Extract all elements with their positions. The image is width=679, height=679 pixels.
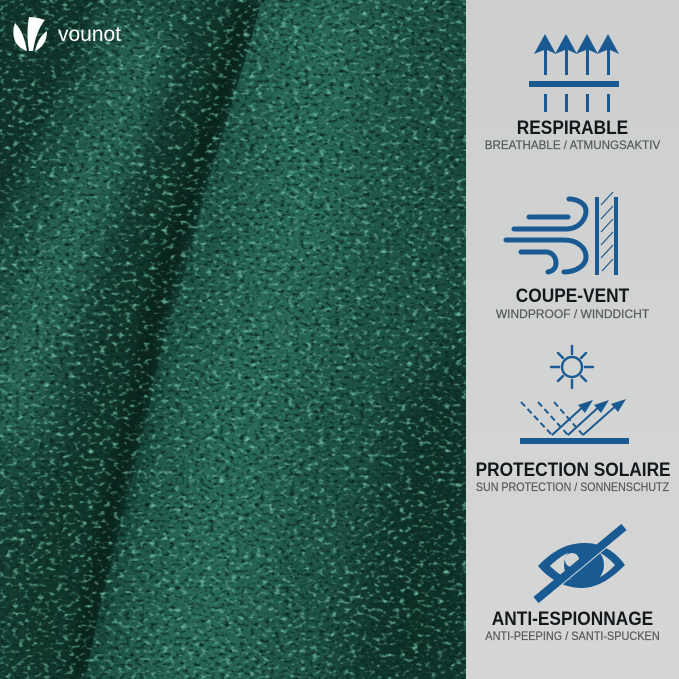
photo: green shade net fabric [0, 0, 466, 679]
heading: anti-espionnage: ANTI-ESPIONNAGE [492, 609, 653, 630]
heading: protection solaire: PROTECTION SOLAIRE [476, 460, 671, 481]
icon: reflected sun rays [520, 399, 629, 444]
subheading: sun protection: SUN PROTECTION / SONNENSCHUTZ [476, 481, 669, 494]
icon: leaf logo [13, 17, 47, 51]
brand name: vounot [58, 23, 121, 46]
icon: breathable arrows [534, 34, 619, 75]
heading: respirable: RESPIRABLE [517, 118, 628, 139]
subheading: breathable: BREATHABLE / ATMUNGSAKTIV [485, 139, 660, 152]
subheading: windproof: WINDPROOF / WINDDICHT [496, 307, 649, 321]
logo: vounot [13, 17, 121, 51]
icon: windproof [504, 192, 618, 275]
heading: coupe-vent: COUPE-VENT [516, 286, 629, 307]
subheading: anti-peeping: ANTI-PEEPING / SANTI-SPUCKEN [485, 630, 660, 643]
icon: crossed-out eye [534, 524, 626, 604]
icon: sun [550, 344, 594, 390]
icon: breathable membrane [529, 81, 619, 112]
side panel background [466, 0, 679, 679]
